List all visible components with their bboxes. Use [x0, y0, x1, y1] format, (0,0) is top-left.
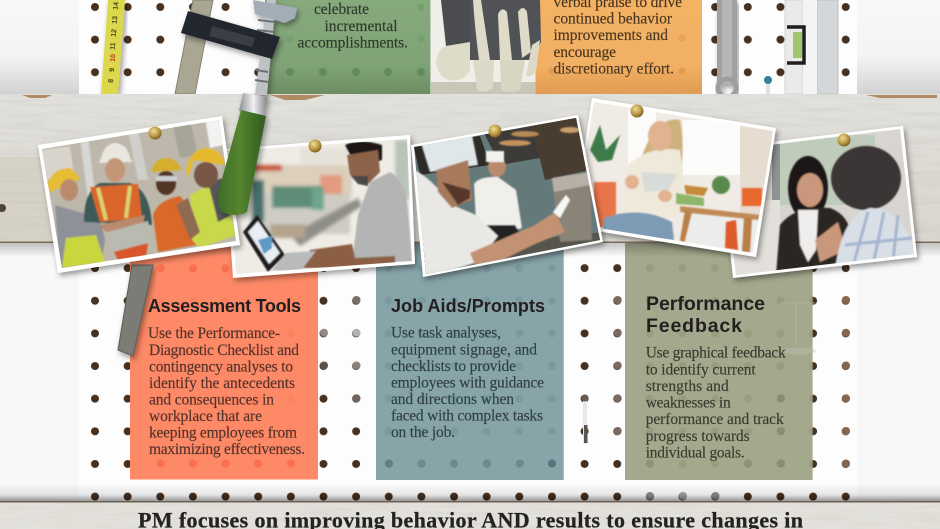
icon: small metal hook [582, 394, 588, 444]
panel: performance feedback text: strengths and [646, 378, 729, 395]
panel: performance feedback text: Feedback [646, 315, 742, 337]
bottom plank [0, 501, 940, 529]
panel: job aids text: and directions when [391, 391, 514, 408]
panel: performance feedback text: weaknesses in [646, 394, 731, 412]
icon: work glove [431, 0, 541, 94]
icon: tape measure: 14 [113, 2, 120, 10]
icon: wrench [717, 0, 737, 97]
panel: performance feedback text: performance and track [646, 411, 784, 428]
icon: tape measure: 9 [109, 68, 116, 72]
panel: assessment tools text: and consequences in [149, 392, 274, 408]
icon: clamp bar upper [175, 0, 213, 94]
panel: job aids backdrop [376, 243, 564, 480]
icon: tape measure: 11 [110, 42, 117, 50]
panel: performance feedback text: Use graphical feedback [646, 345, 786, 362]
panel: job aids text: on the job. [391, 424, 455, 441]
lower clamp bar [118, 265, 153, 356]
brass pins [148, 104, 850, 152]
panel: assessment tools text: keeping employees from [149, 425, 297, 442]
icon: tape measure: 8 [108, 79, 115, 83]
photo: chefs in kitchen [410, 114, 605, 280]
panel: top orange card: continued behavior [554, 10, 673, 28]
panel: top green card: celebrate [314, 1, 369, 18]
panel: job aids text [391, 296, 545, 441]
icon: tape measure: 13 [112, 16, 119, 24]
icon: teal peg [764, 76, 772, 94]
pegboard holes [79, 0, 857, 502]
panel: performance feedback text: progress towards [646, 428, 750, 445]
panel: job aids text: Job Aids/Prompts [391, 296, 545, 316]
panel: assessment tools backdrop [130, 243, 318, 480]
panel: performance feedback text: individual goals. [646, 444, 745, 462]
photo: woman reading card at table [570, 96, 780, 261]
panel: assessment tools text: contingency analyses to [149, 358, 293, 376]
icon: faint hanging hook [780, 303, 816, 354]
panel: job aids text: checklists to provide [391, 358, 516, 375]
icon: spirit level [785, 0, 838, 94]
panel: assessment tools text: Assessment Tools [148, 296, 301, 316]
panel: job aids text: equipment signage, and [391, 342, 537, 358]
shadows from planks [0, 243, 940, 502]
panel: top green card: accomplishments. [298, 34, 408, 52]
icon: clamp with green handle [181, 0, 297, 215]
panel: assessment tools text: maximizing effectiveness. [149, 441, 305, 458]
panel: assessment tools text: identify the antecedents [149, 375, 295, 392]
panel: performance feedback text: Performance [646, 293, 765, 315]
panel: top green card [265, 0, 430, 94]
panel: performance feedback text: to identify current [646, 361, 756, 378]
panel: job aids text: employees with guidance [391, 374, 544, 392]
icon: tape measure: 12 [111, 29, 118, 37]
panel: top green card: incremental [324, 18, 398, 35]
top plank [0, 94, 940, 243]
photo: factory worker on laptop [222, 135, 417, 280]
panel: assessment tools text: Use the Performance- [148, 325, 280, 342]
icon: tape measure: 10 [110, 54, 117, 62]
panel: assessment tools text [148, 296, 305, 458]
panel: job aids text: Use task analyses, [391, 324, 501, 342]
panel: assessment tools text: Diagnostic Checklist and [149, 342, 299, 359]
panel: performance feedback text [646, 293, 786, 462]
panel: assessment tools text: workplace that are [149, 408, 262, 425]
photo: woman at table with card [715, 125, 920, 280]
panel: performance feedback backdrop [625, 243, 813, 480]
panel: top orange card [536, 0, 702, 94]
panel: top orange card: discretionary effort. [554, 60, 674, 78]
photo: construction workers [36, 116, 242, 276]
panel: top orange card: encourage [554, 44, 616, 61]
panel: job aids text: faced with complex tasks [391, 408, 543, 424]
icon: tape measure [101, 0, 125, 94]
panel: top orange card: improvements and [554, 27, 668, 44]
